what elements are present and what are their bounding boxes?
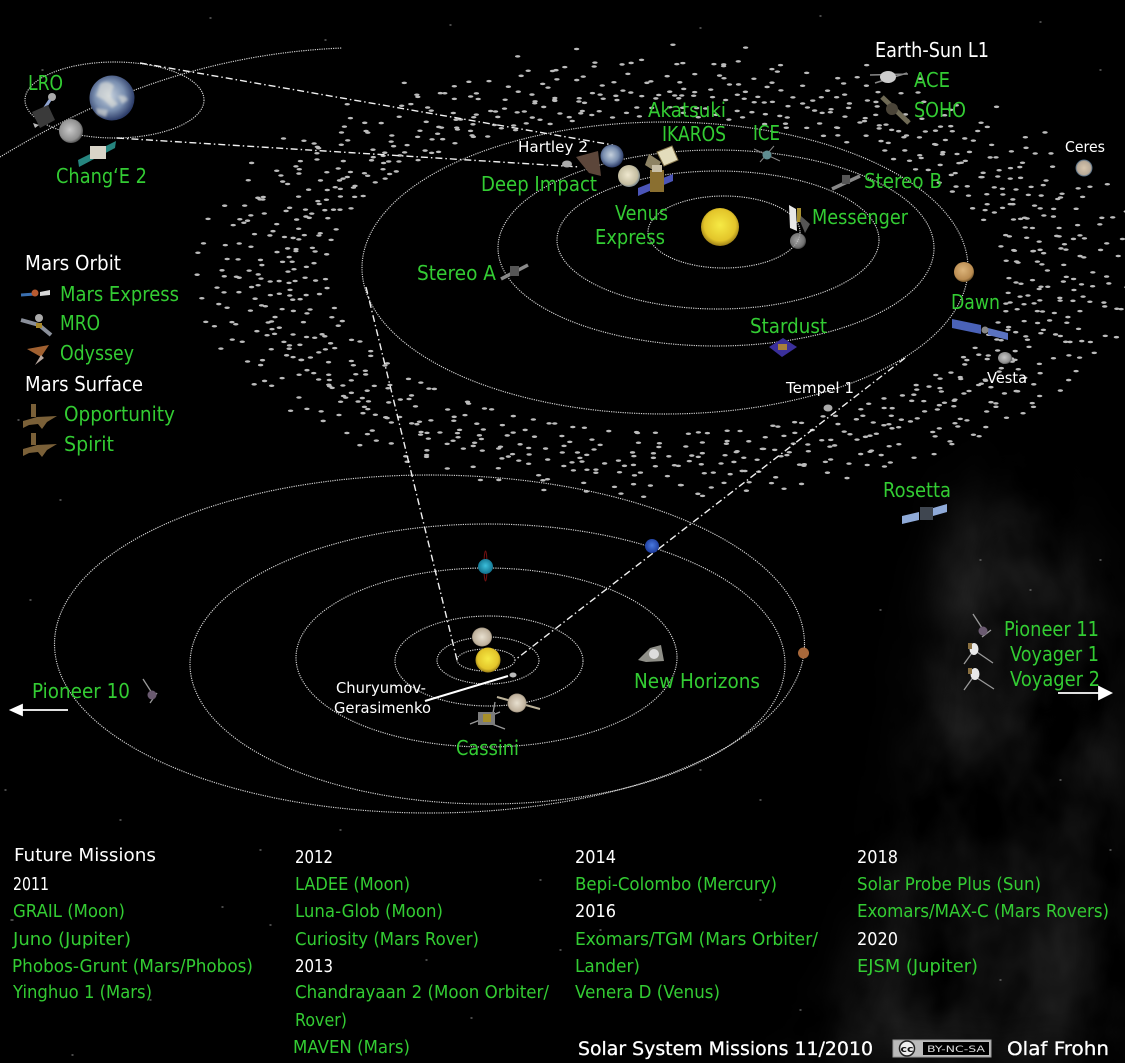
icon: IKAROS <box>657 146 678 166</box>
pointer to comet <box>425 676 508 701</box>
label: Vesta: Vesta <box>987 369 1027 387</box>
icon: Voyager 1 <box>964 643 993 664</box>
label: LRO: LRO <box>28 71 63 95</box>
label: SOHO: SOHO <box>914 98 966 122</box>
year: 2013: 2013 <box>295 956 333 977</box>
item: Solar Probe Plus: Solar Probe Plus (Sun) <box>857 874 1041 895</box>
item: GRAIL: GRAIL (Moon) <box>13 901 125 922</box>
icon: Rosetta <box>902 504 947 524</box>
icon: MRO <box>21 314 51 335</box>
icon: Cassini <box>470 702 505 729</box>
labels: outer solar system missions <box>32 617 1100 760</box>
icon: New Horizons <box>638 645 664 662</box>
label: Hartley 2: Hartley 2 <box>518 138 588 156</box>
icon: Voyager 2 <box>964 668 994 690</box>
licence badge: cc <box>900 1045 914 1055</box>
icon: Pioneer 10 <box>143 679 157 703</box>
footer author: Olaf Frohn <box>1007 1038 1109 1060</box>
Earth and Moon enlarged <box>59 76 134 143</box>
icon: LRO <box>32 93 56 128</box>
label: Dawn: Dawn <box>951 290 1000 314</box>
icon: Deep Impact <box>576 151 601 176</box>
label: IKAROS: IKAROS <box>662 122 726 146</box>
item: MAVEN: MAVEN (Mars) <box>293 1037 410 1058</box>
item: Juno: Juno (Jupiter) <box>12 929 131 950</box>
item: EJSM: EJSM (Jupiter) <box>857 956 978 977</box>
icon: Stardust <box>769 338 797 357</box>
label: Spirit: Spirit <box>64 432 114 456</box>
label: Cassini: Cassini <box>456 736 519 760</box>
item: Exomars/TGM continued: Lander) <box>575 956 640 977</box>
spacecraft <box>21 71 1008 729</box>
icon: ICE <box>754 146 780 162</box>
label: ICE: ICE <box>753 121 780 145</box>
label: Opportunity: Opportunity <box>64 402 175 426</box>
item: Curiosity: Curiosity (Mars Rover) <box>295 929 479 950</box>
panel: future missions, column 3 <box>575 847 819 1003</box>
label: Deep Impact: Deep Impact <box>481 172 597 196</box>
icon: Chang'E 2 <box>78 141 116 167</box>
item: Bepi-Colombo: Bepi-Colombo (Mercury) <box>575 874 777 895</box>
year: 2020: 2020 <box>857 929 898 950</box>
year: 2014: 2014 <box>575 847 616 868</box>
icon: Opportunity rover <box>23 404 57 429</box>
heading: Mars Surface: Mars Surface <box>25 372 143 396</box>
planets of the outer system <box>472 539 809 712</box>
planets and small bodies of the inner system <box>562 144 1092 412</box>
licence badge: BY-NC-SA <box>927 1045 986 1055</box>
item: Exomars/MAX-C: Exomars/MAX-C (Mars Rovers) <box>857 901 1109 922</box>
list: Earth-Sun L1 <box>875 38 989 122</box>
icon: SOHO <box>882 97 909 123</box>
icon: Pioneer 11 <box>973 614 991 637</box>
list: Mars missions <box>25 251 179 456</box>
heading: Mars Orbit: Mars Orbit <box>25 251 121 275</box>
item: Chandrayaan 2 continued: Rover) <box>295 1010 347 1031</box>
label: MRO: MRO <box>60 311 100 335</box>
label: Ceres: Ceres <box>1065 138 1105 156</box>
icon: ACE <box>870 71 908 83</box>
label: Stereo B: Stereo B <box>864 169 942 193</box>
item: Yinghuo 1: Yinghuo 1 (Mars) <box>12 982 152 1003</box>
label: Churyumov-: Churyumov- <box>336 679 426 697</box>
icon: Spirit rover <box>23 433 57 457</box>
outer planet orbits <box>54 475 804 813</box>
year: 2012: 2012 <box>295 847 333 868</box>
year: 2011: 2011 <box>13 874 49 895</box>
panel: future missions, column 1 <box>12 845 253 1003</box>
item: Luna-Glob: Luna-Glob (Moon) <box>295 901 443 922</box>
icon: Dawn <box>952 319 1008 340</box>
label: Akatsuki: Akatsuki <box>648 98 726 122</box>
label: Voyager 1: Voyager 1 <box>1010 642 1099 666</box>
label: Tempel 1: Tempel 1 <box>785 379 854 397</box>
heading: Future Missions: Future Missions <box>14 845 156 866</box>
label: Chang'E 2: Chang‘E 2 <box>56 164 147 188</box>
label: Mars Express: Mars Express <box>60 282 179 306</box>
item: Venera D: Venera D (Venus) <box>575 982 720 1003</box>
panel: future missions, column 2 <box>293 847 550 1058</box>
labels: inner solar system missions <box>417 98 1000 502</box>
icon: Akatsuki <box>645 154 661 172</box>
item: Chandrayaan 2: Chandrayaan 2 (Moon Orbiter/ <box>295 982 550 1003</box>
icon: Stereo A <box>501 265 528 279</box>
inner planet orbits <box>362 122 968 414</box>
arrow: Voyager <box>1058 687 1111 699</box>
label: Odyssey: Odyssey <box>60 341 134 365</box>
icon: Odyssey <box>27 345 49 365</box>
icon: Stereo B <box>832 175 860 189</box>
labels: Moon system <box>28 71 147 188</box>
year: 2016: 2016 <box>575 901 616 922</box>
label: Pioneer 10: Pioneer 10 <box>32 679 130 703</box>
label: Venus: Venus <box>615 201 668 225</box>
label: ACE: ACE <box>914 68 950 92</box>
label: Express: Express <box>595 225 665 249</box>
label: New Horizons: New Horizons <box>634 669 760 693</box>
label: Messenger: Messenger <box>812 205 909 229</box>
zoom projection lines <box>117 63 905 660</box>
label: Gerasimenko: Gerasimenko <box>334 699 431 717</box>
Earth-Moon orbits <box>0 48 342 157</box>
labels: small bodies <box>334 138 1105 717</box>
label: Stereo A: Stereo A <box>417 261 496 285</box>
label: Voyager 2: Voyager 2 <box>1010 667 1100 691</box>
item: Phobos-Grunt: Phobos-Grunt (Mars/Phobos) <box>12 956 253 977</box>
Sun <box>701 208 739 246</box>
icon: Mars Express <box>21 290 50 296</box>
icon: Venus Express <box>638 165 673 196</box>
label: Stardust: Stardust <box>750 314 827 338</box>
icon: Messenger <box>789 205 810 233</box>
footer title: Solar System Missions 11/2010 <box>578 1038 873 1060</box>
label: Rosetta: Rosetta <box>883 478 951 502</box>
year: 2018: 2018 <box>857 847 898 868</box>
label: Pioneer 11: Pioneer 11 <box>1004 617 1099 641</box>
licence badge <box>893 1040 991 1057</box>
item: LADEE: LADEE (Moon) <box>295 874 410 895</box>
arrow: Pioneer 10 <box>11 705 68 715</box>
item: Exomars/TGM: Exomars/TGM (Mars Orbiter/ <box>575 929 819 950</box>
asteroid belt <box>197 45 1125 497</box>
heading: Earth-Sun L1: Earth-Sun L1 <box>875 38 989 62</box>
panel: future missions, column 4 <box>857 847 1109 977</box>
